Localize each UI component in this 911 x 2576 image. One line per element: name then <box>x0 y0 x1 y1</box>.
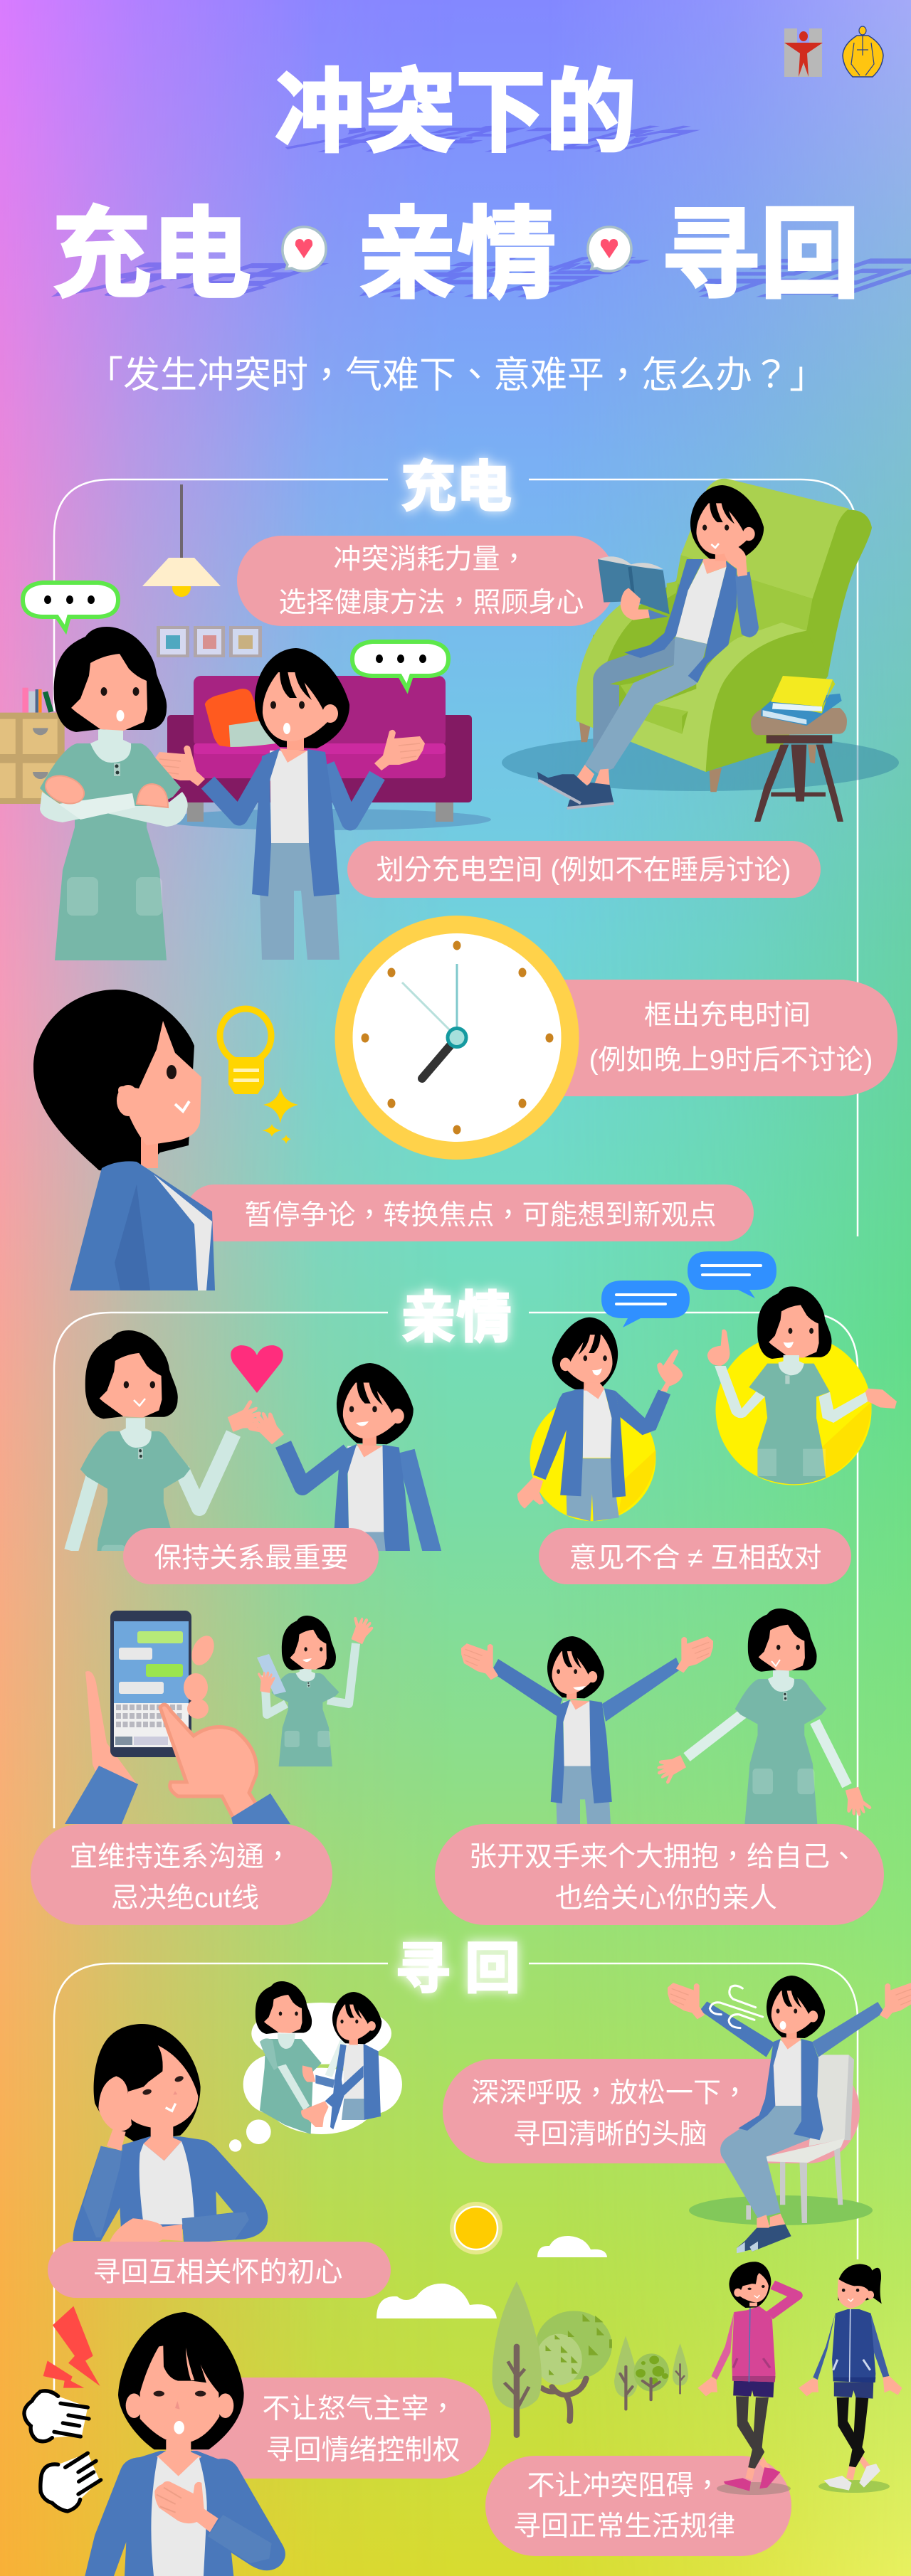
title line 2: 充电 <box>52 198 251 310</box>
callout: routine <box>485 2456 791 2556</box>
icon: red lightning bolts <box>43 2306 100 2388</box>
callout: keep in touch: 宜维持连系沟通， <box>70 1842 292 1872</box>
yellow circle right <box>716 1335 872 1485</box>
figure: profile thinking <box>33 990 215 1290</box>
figure: mother shrugging <box>707 1286 897 1484</box>
callout: disagreement not enemies: 意见不合 ≠ 互相敌对 <box>569 1543 822 1574</box>
callout: conflict drains strength: 冲突消耗力量， <box>333 544 528 575</box>
figure: daughter arms wide <box>461 1636 713 1824</box>
icon: hands with smartphone <box>65 1611 290 1824</box>
figure: mother arms crossed <box>40 627 188 960</box>
title shadow line 1: 冲突下的 <box>253 124 726 155</box>
armchair <box>576 479 872 792</box>
callout: charging time: 框出充电时间 <box>644 1000 811 1031</box>
callout: keep in touch <box>31 1824 332 1925</box>
wall pictures <box>157 626 262 657</box>
callout: pause arguing: 暂停争论，转换焦点，可能想到新观点 <box>244 1200 717 1231</box>
shadow navy runner <box>818 2480 890 2493</box>
shadow pink runner <box>717 2482 791 2495</box>
figure: pink jacket walker <box>697 2262 797 2491</box>
figure shadow: breathing <box>689 2195 873 2225</box>
callout: original care <box>48 2242 391 2298</box>
panel frame: charging <box>54 479 858 1236</box>
figure: mother holding hands <box>64 1330 261 1551</box>
icon: organisation logo golden hands <box>843 26 883 77</box>
icon: heart bubble left <box>283 227 326 271</box>
figure: navy jacket walker <box>799 2264 902 2491</box>
title shadow line 2 <box>23 255 911 302</box>
callout: no anger: 不让怒气主宰， <box>262 2394 457 2424</box>
callout: big hug <box>435 1824 884 1925</box>
icon: heart bubble right <box>588 227 631 271</box>
icon: ceiling lamp <box>142 484 221 597</box>
speech bubble: daughter <box>352 642 448 689</box>
figure: daughter holding hands <box>248 1363 441 1551</box>
title shadow line 2: 亲情 <box>329 255 671 302</box>
callout: charging space <box>347 841 821 898</box>
icon: sun <box>450 2202 502 2254</box>
callout: original care: 寻回互相关怀的初心 <box>93 2257 343 2288</box>
icon: steam puff lower <box>41 2453 101 2511</box>
callout: charging time <box>541 980 897 1096</box>
figure: daughter hand on cheek <box>73 2024 268 2248</box>
callout: keep relationship: 保持关系最重要 <box>154 1543 349 1574</box>
figure: daughter breathing on chair <box>662 1976 911 2253</box>
icon: clock <box>335 916 579 1160</box>
panel frame: retrieve <box>54 1963 858 2390</box>
speech bubble blue upper <box>688 1251 776 1298</box>
callout: conflict drains strength <box>237 536 616 626</box>
callout: no anger: 寻回情绪控制权 <box>265 2435 460 2466</box>
figure: daughter pointing <box>517 1318 683 1521</box>
side table with books <box>751 676 847 822</box>
figure: mother arms open <box>653 1608 873 1824</box>
heading: retrieve: 寻回 <box>395 1937 535 2000</box>
icon: steam puff upper <box>24 2391 89 2442</box>
heading: family: 亲情 <box>401 1286 512 1349</box>
callout: charging space: 划分充电空间 (例如不在睡房讨论) <box>376 855 791 886</box>
callout: conflict drains strength: 选择健康方法，照顾身心 <box>278 588 584 618</box>
callout: deep breath: 寻回清晰的头脑 <box>512 2119 707 2150</box>
icon: organisation logo red figure <box>784 28 823 77</box>
callout: no anger <box>192 2378 491 2479</box>
callout: deep breath <box>443 2059 860 2163</box>
figure: small mother and daughter in thought <box>256 1981 381 2134</box>
floor shadow under sofa <box>159 809 491 830</box>
icon: large cloud <box>376 2284 497 2318</box>
thought bubble cloud <box>229 2003 402 2152</box>
callout: routine: 寻回正常生活规律 <box>513 2511 735 2542</box>
callout: disagreement not enemies <box>539 1528 851 1584</box>
callout: deep breath: 深深呼吸，放松一下， <box>471 2078 749 2109</box>
title line 2 <box>52 198 860 310</box>
title line 1: 冲突下的 <box>275 62 636 163</box>
figure: daughter calming <box>85 2312 285 2576</box>
icon: light bulb with sparkles <box>220 1009 298 1144</box>
icon: pink heart <box>231 1345 283 1393</box>
figure: daughter reading <box>537 485 764 809</box>
callout: routine: 不让冲突阻碍， <box>527 2471 722 2501</box>
callout: big hug: 张开双手来个大拥抱，给自己、 <box>469 1842 858 1872</box>
title line 2: 寻回 <box>660 198 860 310</box>
speech bubble: mother <box>23 583 118 630</box>
title shadow line 2: 充电 <box>23 255 366 302</box>
figure: small mother with phone <box>255 1613 376 1766</box>
callout: pause arguing <box>186 1184 754 1241</box>
panel frame: family <box>54 1313 858 1832</box>
trees <box>492 2281 688 2435</box>
subtitle: 「发生冲突时，气难下、意难平，怎么办？」 <box>86 355 826 396</box>
armchair floor shadow <box>502 734 899 791</box>
title line 2: 亲情 <box>357 198 557 310</box>
icon: small cloud <box>537 2236 607 2257</box>
callout: charging time: (例如晚上9时后不讨论) <box>589 1045 873 1076</box>
figure: daughter talking <box>154 648 425 960</box>
callout: big hug: 也给关心你的亲人 <box>555 1883 777 1914</box>
speech bubble blue lower <box>601 1281 690 1327</box>
sofa <box>167 676 472 822</box>
callout: keep relationship <box>123 1528 379 1584</box>
callout: keep in touch: 忌决绝cut线 <box>111 1883 259 1914</box>
yellow circle left <box>530 1396 655 1521</box>
heading: charging: 充电 <box>401 455 512 518</box>
bookshelf <box>0 688 65 804</box>
